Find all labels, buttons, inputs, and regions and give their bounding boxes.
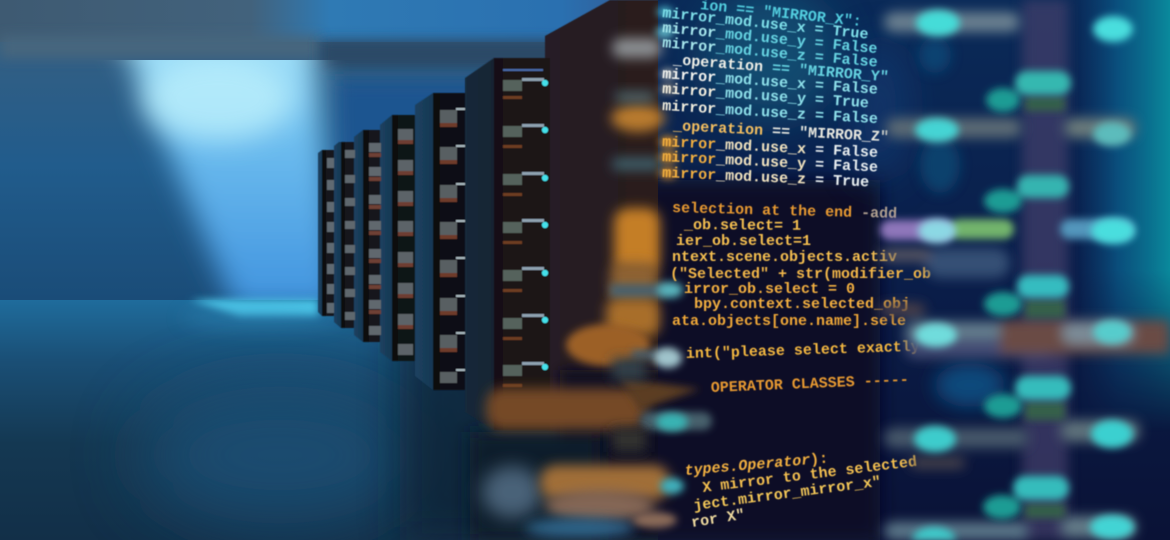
right column grey light bars bbox=[880, 12, 1170, 540]
code: selection block bbox=[670, 200, 931, 330]
rack 5 bbox=[415, 93, 465, 390]
rack 3 bbox=[354, 130, 381, 342]
code: print and operator classes: int("please select exactly bbox=[686, 339, 920, 363]
teal bokeh lights bbox=[912, 10, 1135, 540]
code: selection block: ata.objects[one.name].sele bbox=[672, 313, 906, 330]
purple green and blue accent bars bbox=[880, 219, 1134, 240]
rack 7 bbox=[545, 0, 880, 440]
rack 1 bbox=[318, 150, 334, 316]
code: print and operator classes: OPERATOR CLASSES ----- bbox=[710, 372, 909, 397]
code: mirror z block: _operation == "MIRROR_Z" bbox=[672, 118, 889, 146]
code: types operator block: ject.mirror_mirror_x" bbox=[692, 474, 882, 515]
code: mirror z block: mirror_mod.use_x = False bbox=[662, 134, 878, 162]
code: mirror z block: mirror_mod.use_z = True bbox=[662, 165, 869, 191]
code: mirror z block bbox=[662, 118, 889, 191]
code: mirror z block: mirror_mod.use_y = False bbox=[662, 149, 878, 177]
back wall light panel bbox=[109, 60, 342, 300]
code: mirror x block: mirror_mod.use_y = False bbox=[662, 20, 878, 58]
code: selection block: selection at the end -add bbox=[672, 200, 897, 223]
code: mirror x block: mirror_mod.use_x = False bbox=[662, 66, 878, 99]
code: mirror x block bbox=[661, 0, 889, 128]
code: mirror x block: mirror_mod.use_z = False bbox=[662, 98, 878, 128]
code: print and operator classes bbox=[686, 339, 920, 397]
code: types operator block: ror X" bbox=[690, 507, 746, 532]
code: mirror x block: mirror_mod.use_z = False bbox=[662, 35, 878, 72]
code: selection block: _ob.select= 1 bbox=[683, 217, 801, 235]
code: types operator block: types.Operator): bbox=[684, 450, 829, 480]
code: selection block: ier_ob.select=1 bbox=[676, 233, 811, 250]
code: mirror x block: mirror_mod.use_y = True bbox=[662, 81, 869, 112]
dark area below the racks bbox=[470, 370, 670, 540]
rack 6 bbox=[465, 58, 550, 430]
code: selection block: ntext.scene.objects.activ bbox=[672, 249, 897, 266]
server rack row bbox=[318, 0, 880, 440]
code text lines bbox=[661, 0, 931, 532]
code: types operator block bbox=[684, 450, 918, 532]
code: types operator block: X mirror to the selected bbox=[702, 454, 918, 497]
rack 2 bbox=[334, 142, 355, 328]
code: mirror x block: mirror_mod.use_x = True bbox=[661, 5, 869, 44]
code: selection block: irror_ob.select = 0 bbox=[684, 281, 855, 298]
code: selection block: bpy.context.selected_obj bbox=[694, 296, 910, 313]
floor light reflection bbox=[182, 300, 342, 328]
dark green shades under teal triples bbox=[1025, 97, 1065, 518]
blurred grey and teal bokeh near code bbox=[610, 7, 712, 494]
blurred orange bokeh bbox=[482, 104, 700, 538]
code: selection block: ("Selected" + str(modifier_ob bbox=[670, 266, 931, 283]
dark code screen bbox=[640, 0, 1170, 540]
rack 4 bbox=[380, 115, 415, 361]
code: mirror x block: _operation == "MIRROR_Y" bbox=[672, 52, 889, 86]
